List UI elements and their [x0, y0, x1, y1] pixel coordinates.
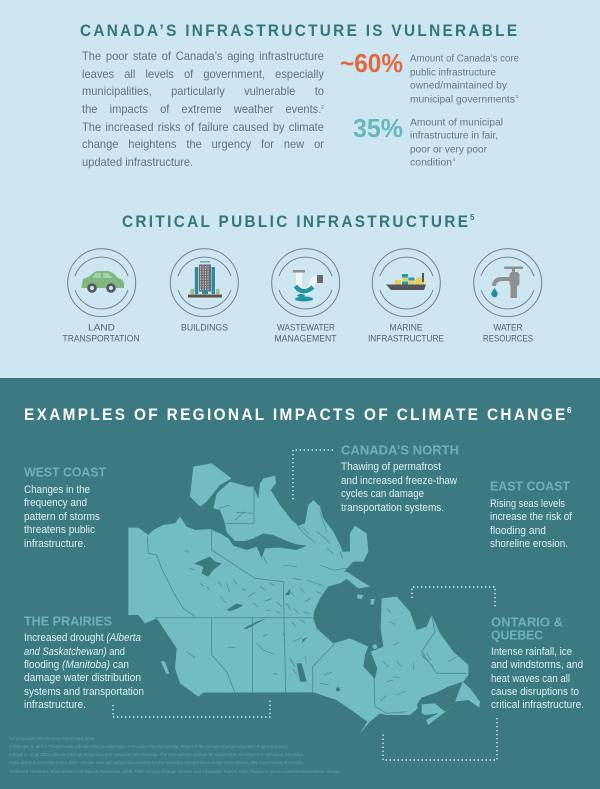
- text block: Ontario and Quebec: QUEBEC: [491, 628, 543, 642]
- footnotes: Palko and D.S. Lemmen (Eds.). 2017. Climate risks and adaptation practices for the Canadian transportation sector 2016. Ottawa, ON: Government of Canada.: [9, 760, 304, 765]
- stat: 35 percent: Amount of municipal: [410, 118, 503, 128]
- stat: 35 percent: condition: [410, 158, 452, 168]
- text block: The Prairies: infrastructure.: [24, 699, 86, 711]
- icon group: water resources: [474, 249, 542, 344]
- label: water resources: [483, 322, 533, 344]
- text block: West Coast: threatens public: [24, 524, 95, 536]
- text block: West Coast: Changes in the: [24, 484, 90, 496]
- text block: intro paragraph: change heightens the urgency for new or: [82, 138, 324, 151]
- text block: Canada's North: cycles can damage: [341, 488, 424, 500]
- label: marine infrastructure: INFRASTRUCTURE: [368, 332, 444, 344]
- text block: Ontario and Quebec: and windstorms, and: [491, 659, 583, 671]
- icon: office tower: [188, 261, 222, 298]
- text block: intro paragraph: The increased risks of failure caused by climate: [82, 121, 324, 134]
- text block: Canada's North: transportation systems.: [341, 502, 444, 514]
- stat: 35 percent: 4: [452, 157, 456, 162]
- text block: West Coast: WEST COAST: [24, 466, 106, 480]
- label: water resources: WATER: [494, 322, 523, 332]
- text block: Ontario and Quebec: Intense rainfall, ice: [491, 646, 572, 658]
- text block: intro paragraph: municipalities, particularly vulnerable to: [82, 85, 324, 98]
- label: marine infrastructure: MARINE: [390, 322, 422, 332]
- callout connector: Ontario and Quebec upper: [412, 587, 495, 608]
- footnotes: Northwest Territories, Environment and Natural Resources. 2008, NWT Climate Change Impacts and Adaptation Report, https://www.enr.gov.nt.ca/en/services/climate-change.: [9, 769, 341, 774]
- stat: about 60 percent: Amount of Canada’s core: [410, 54, 519, 64]
- text block: The Prairies: Increased drought (Alberta: [24, 632, 141, 644]
- text block: Ontario and Quebec: critical infrastructure.: [491, 699, 584, 711]
- text block: West Coast: frequency and: [24, 497, 87, 509]
- text block: Canada's North: and increased freeze-thaw: [341, 475, 458, 487]
- stat: 35 percent: infrastructure in fair,: [410, 130, 498, 142]
- label: land transportation: [62, 322, 140, 344]
- lakes: [194, 557, 377, 691]
- text block: Ontario and Quebec: [491, 616, 584, 711]
- callout connector: Canada's north: [293, 450, 333, 502]
- icon group: marine infrastructure: [368, 249, 444, 344]
- arctic channels and small lakes: [185, 505, 458, 701]
- text block: East Coast: Rising seas levels: [490, 498, 565, 510]
- icon group: wastewater management: [272, 249, 340, 344]
- heading: examples of regional impacts: EXAMPLES OF REGIONAL IMPACTS OF CLIMATE CHANGE: [24, 407, 565, 424]
- icon: car: [82, 271, 124, 293]
- text block: Ontario and Quebec: ONTARIO &: [491, 616, 563, 630]
- stat: about 60 percent: [340, 50, 519, 106]
- label: wastewater management: WASTEWATER: [277, 322, 335, 332]
- text block: intro paragraph: [82, 48, 332, 178]
- text block: intro paragraph: updated infrastructure.: [82, 156, 193, 169]
- footnotes: 1 2 3 Canadian Infrastructure Report Card, 2016.: [9, 736, 95, 741]
- text block: The Prairies: flooding (Manitoba) can: [24, 659, 129, 671]
- text block: intro paragraph: The poor state of Canada’s aging infrastructure: [82, 50, 324, 63]
- stat: 35 percent: poor or very poor: [410, 144, 488, 156]
- text block: East Coast: [490, 480, 573, 550]
- text block: West Coast: infrastructure.: [24, 538, 86, 550]
- icon group: land transportation: [62, 249, 140, 344]
- text block: Ontario and Quebec: heat waves can all: [491, 673, 570, 685]
- text block: Canada's North: CANADA’S NORTH: [341, 444, 459, 458]
- stat: about 60 percent: owned/maintained by: [410, 80, 507, 92]
- heading: critical public infrastructure: 5: [470, 213, 475, 222]
- text block: West Coast: [24, 466, 106, 550]
- text block: West Coast: pattern of storms: [24, 511, 100, 523]
- text block: intro paragraph: the impacts of extreme weather events.2: [82, 103, 324, 116]
- icon: cargo ship: [386, 273, 426, 290]
- icon group: buildings: [170, 249, 238, 332]
- icon: pipe: [293, 270, 323, 302]
- map of Canada: [128, 463, 480, 733]
- text block: East Coast: flooding and: [490, 525, 546, 537]
- footnotes: 3 Boyle J., et al. 2013, Climate Change Adaptation and Canadian Infrastructure. The International Institute for Sustainable Development, Winnipeg, Manitoba.: [9, 752, 304, 757]
- icon: tap: [491, 266, 523, 298]
- stat: about 60 percent: ~60%: [340, 50, 403, 78]
- text block: intro paragraph: leaves all levels of government, especially: [82, 68, 324, 81]
- callout connector: Ontario and Quebec lower: [383, 718, 497, 760]
- stat: about 60 percent: municipal governments: [410, 94, 515, 106]
- text block: The Prairies: systems and transportation: [24, 686, 144, 698]
- stat: about 60 percent: public infrastructure: [410, 68, 496, 78]
- title: Canada's infrastructure is vulnerable: CANADA’S INFRASTRUCTURE IS VULNERABLE: [80, 23, 517, 40]
- label: land transportation: LAND: [88, 322, 115, 332]
- label: wastewater management: [274, 322, 337, 344]
- label: marine infrastructure: [368, 322, 444, 344]
- text block: East Coast: EAST COAST: [490, 480, 570, 494]
- text block: Ontario and Quebec: cause disruptions to: [491, 686, 579, 698]
- text block: Canada's North: [341, 444, 459, 514]
- provincial borders: [147, 488, 467, 713]
- heading: examples of regional impacts: 6: [567, 406, 572, 415]
- label: water resources: RESOURCES: [483, 332, 533, 344]
- label: land transportation: TRANSPORTATION: [62, 332, 140, 344]
- callout connector: the Prairies: [113, 700, 270, 717]
- stat: 35 percent: [353, 115, 503, 168]
- text block: East Coast: shoreline erosion.: [490, 538, 568, 550]
- text block: East Coast: increase the risk of: [490, 511, 573, 523]
- text block: The Prairies: THE PRAIRIES: [24, 614, 112, 628]
- text block: The Prairies: and Saskatchewan) and: [24, 646, 125, 658]
- text block: Canada's North: Thawing of permafrost: [341, 461, 442, 473]
- heading: critical public infrastructure: CRITICAL PUBLIC INFRASTRUCTURE: [122, 214, 468, 231]
- footnotes: 2 Feltmate, B. and J. Thistlethwaite, Climate Change Adaptation: A Priorities Plan for Canada, Report of the Climate Change Adaptation Project (Canada).: [9, 744, 289, 749]
- label: buildings: BUILDINGS: [181, 322, 228, 332]
- stat: about 60 percent: 3: [516, 94, 518, 99]
- stat: 35 percent: 35%: [353, 115, 403, 143]
- label: wastewater management: MANAGEMENT: [274, 332, 337, 344]
- text block: The Prairies: damage water distribution: [24, 672, 141, 684]
- footnotes: [9, 736, 341, 774]
- text block: The Prairies: [24, 614, 144, 711]
